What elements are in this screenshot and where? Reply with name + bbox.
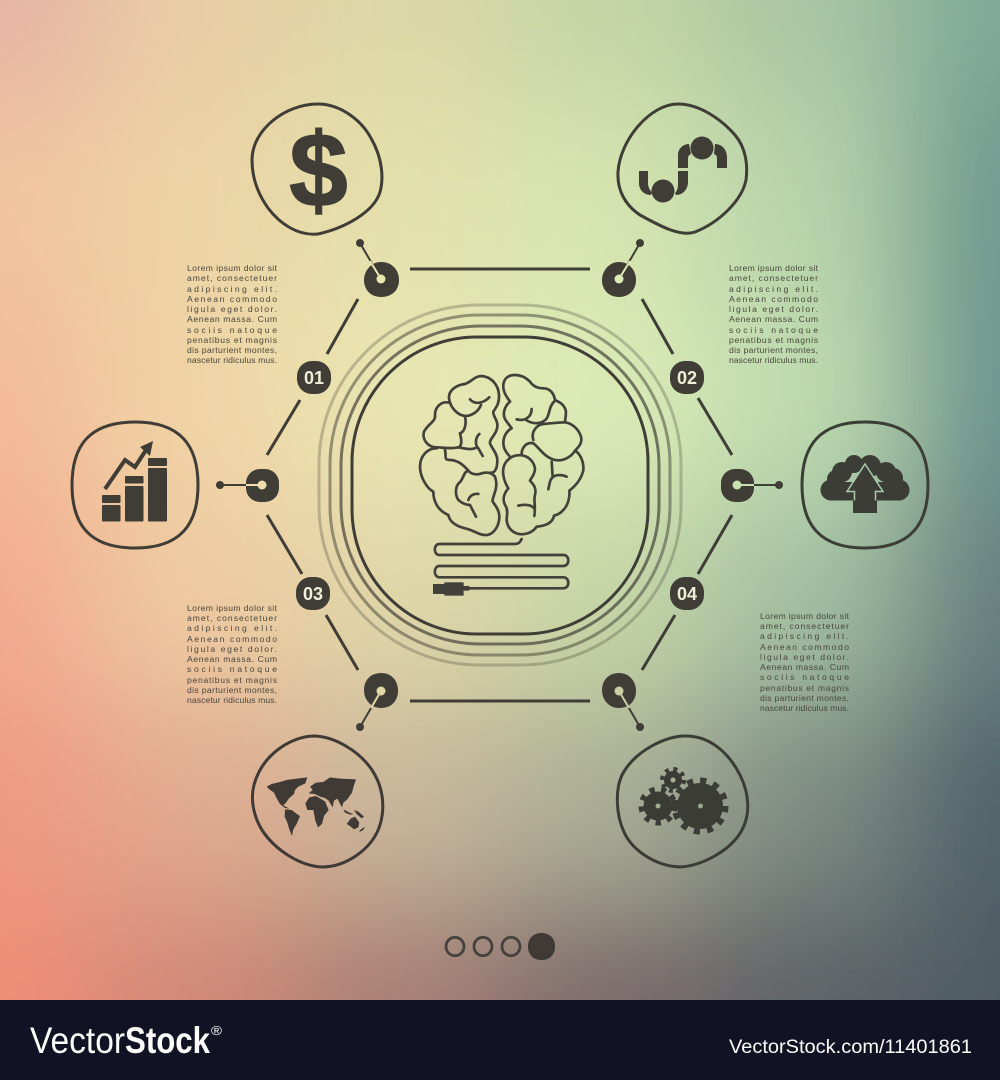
text block top right: amet, consectetuer <box>729 273 818 283</box>
icon: people link in blob <box>618 104 747 233</box>
footer image id: VectorStock.com/11401861 <box>729 1036 972 1058</box>
text block top left: Lorem ipsum dolor sit <box>187 263 278 273</box>
left gear <box>642 790 674 822</box>
node: top left <box>356 239 399 297</box>
node: left <box>216 469 279 502</box>
node: top right <box>602 239 644 297</box>
text block bottom right <box>760 611 850 713</box>
text block bottom right: penatibus et magnis <box>760 683 849 693</box>
text block bottom left: penatibus et magnis <box>187 675 277 685</box>
text block top right: sociis natoque <box>729 325 818 335</box>
text block bottom left: amet, consectetuer <box>187 613 277 623</box>
icon: gears in blob <box>617 736 748 867</box>
text block top right: penatibus et magnis <box>729 335 818 345</box>
badge 04 <box>670 577 704 610</box>
hexagon connector lines <box>267 269 732 701</box>
text block bottom left: nascetur ridiculus mus. <box>187 695 277 705</box>
badge 01: 01 <box>304 368 324 388</box>
badge 02 <box>670 361 704 394</box>
text block top left: dis parturient montes, <box>187 345 277 355</box>
text block top left: penatibus et magnis <box>187 335 277 345</box>
text block top left: adipiscing elit. <box>187 284 277 294</box>
icon: brain with cable <box>420 375 583 596</box>
text block bottom left: dis parturient montes, <box>187 685 277 695</box>
text block top right: Lorem ipsum dolor sit <box>729 263 819 273</box>
text block bottom left: Lorem ipsum dolor sit <box>187 603 278 613</box>
big gear <box>674 780 726 832</box>
central concentric rounded rings <box>319 305 681 665</box>
text block top left: Aenean commodo <box>187 294 277 304</box>
text block top right: Aenean massa. Cum <box>729 314 818 324</box>
text block top left: Aenean massa. Cum <box>187 314 277 324</box>
badge 03 <box>296 577 330 610</box>
text block bottom right: ligula eget dolor. <box>760 652 849 662</box>
text block top right: ligula eget dolor. <box>729 304 818 314</box>
continents <box>267 777 365 836</box>
text block bottom left: ligula eget dolor. <box>187 644 277 654</box>
brain left hemisphere <box>420 376 499 535</box>
text block top left: amet, consectetuer <box>187 273 277 283</box>
node: bottom right <box>602 673 644 731</box>
text block top right <box>729 263 819 365</box>
text block top right: dis parturient montes, <box>729 345 818 355</box>
pagination dots <box>446 933 555 960</box>
text block bottom right: Aenean massa. Cum <box>760 662 849 672</box>
footer logo <box>30 1020 222 1061</box>
node: bottom left <box>356 673 398 731</box>
text block top left: nascetur ridiculus mus. <box>187 355 277 365</box>
icon: dollar in blob <box>252 104 382 234</box>
usb plug <box>433 582 469 596</box>
icon: world map in blob <box>252 736 383 867</box>
badge 01 <box>297 361 331 394</box>
text block top right: adipiscing elit. <box>729 284 818 294</box>
text block bottom right: amet, consectetuer <box>760 621 849 631</box>
node: right <box>721 469 783 502</box>
icon: dollar in blob: $ <box>289 112 348 229</box>
footer logo: ® <box>211 1023 222 1038</box>
text block bottom left: Aenean commodo <box>187 634 277 644</box>
footer bar <box>0 1000 1000 1080</box>
icon: cloud upload in rounded frame <box>802 422 928 548</box>
text block top right: nascetur ridiculus mus. <box>729 355 818 365</box>
icon: bar chart in rounded frame <box>72 422 198 548</box>
text block top left: ligula eget dolor. <box>187 304 277 314</box>
text block bottom right: dis parturient montes, <box>760 693 849 703</box>
badge 02: 02 <box>677 368 697 388</box>
text block bottom right: nascetur ridiculus mus. <box>760 703 849 713</box>
usb cable <box>435 539 568 588</box>
top gear <box>662 770 684 790</box>
badge 04: 04 <box>677 584 697 604</box>
text block bottom right: Lorem ipsum dolor sit <box>760 611 850 621</box>
text block bottom left <box>187 603 278 705</box>
text block bottom left: sociis natoque <box>187 664 277 674</box>
text block bottom right: sociis natoque <box>760 672 849 682</box>
text block bottom right: Aenean commodo <box>760 642 849 652</box>
text block bottom right: adipiscing elit. <box>760 631 849 641</box>
brain right hemisphere <box>503 375 583 534</box>
text block bottom left: adipiscing elit. <box>187 623 277 633</box>
text block top left: sociis natoque <box>187 325 277 335</box>
footer logo: Stock <box>125 1020 210 1061</box>
footer logo: Vector <box>30 1020 125 1061</box>
badge 03: 03 <box>303 584 323 604</box>
text block top right: Aenean commodo <box>729 294 818 304</box>
text block top left <box>187 263 278 365</box>
text block bottom left: Aenean massa. Cum <box>187 654 277 664</box>
